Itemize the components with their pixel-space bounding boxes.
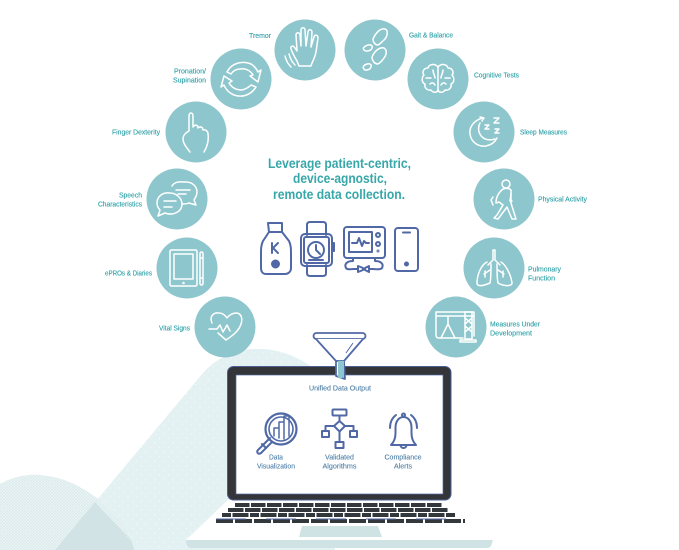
- text: data visualization: Data: [269, 454, 283, 462]
- title: Leverage patient-centric,: [268, 155, 411, 171]
- icon: compliance alerts: [390, 414, 417, 448]
- measure: cognitive tests: [408, 48, 519, 110]
- text: data visualization: [257, 454, 295, 470]
- title: remote data collection.: [273, 186, 405, 202]
- laptop trackpad: [299, 526, 382, 537]
- text: compliance alerts: Compliance: [384, 454, 422, 462]
- laptop base shadow: [186, 540, 493, 548]
- measure: vital signs: [159, 296, 256, 358]
- text: validated algorithms: Validated: [325, 454, 354, 462]
- device: smartwatch: [301, 222, 334, 276]
- measure: measures under development: Measures Under: [490, 322, 541, 328]
- icon: data visualization: [257, 414, 296, 454]
- measure: pulmonary function: [464, 238, 561, 298]
- text: compliance alerts: Alerts: [394, 464, 412, 470]
- measure: sleep measures: [454, 102, 567, 162]
- measure: vital signs: Vital Signs: [159, 326, 190, 332]
- measure: physical activity: [474, 168, 587, 230]
- background: dotted blob: [0, 475, 134, 550]
- measure: gait and balance: [344, 20, 453, 80]
- background: light diagonal band: [55, 349, 335, 550]
- measure: pulmonary function: Function: [528, 276, 555, 282]
- measure: pronation/supination: Supination: [173, 78, 206, 84]
- background: blob overlap: [55, 502, 140, 550]
- device: wearable sensor: [261, 223, 291, 274]
- measure: ePROs and diaries: [105, 238, 218, 298]
- measure: sleep measures: Sleep Measures: [520, 130, 567, 136]
- measure: tremor: [249, 20, 336, 80]
- measure: speech characteristics: [98, 168, 208, 230]
- laptop: [186, 366, 493, 548]
- measure: finger dexterity: [112, 102, 226, 162]
- measure: measures under development: Development: [490, 330, 532, 338]
- laptop screen frame: [228, 366, 451, 500]
- title: [268, 155, 411, 202]
- title: device-agnostic,: [293, 170, 387, 186]
- laptop base: [186, 498, 493, 545]
- measure: measures under development: [426, 296, 541, 358]
- device: phone: [395, 228, 418, 271]
- measure: ePROs and diaries: ePROs & Diaries: [105, 270, 152, 278]
- icon: validated algorithms: [322, 410, 357, 448]
- laptop keyboard: [216, 505, 465, 521]
- measure: speech characteristics: Speech: [119, 192, 142, 200]
- device: monitor: [344, 227, 385, 272]
- measure: pronation/supination: Pronation/: [174, 68, 206, 76]
- measure: pulmonary function: Pulmonary: [528, 266, 561, 274]
- measure: tremor: Tremor: [249, 33, 272, 40]
- funnel: [314, 333, 366, 379]
- measure: finger dexterity: Finger Dexterity: [112, 130, 160, 136]
- measure: physical activity: Physical Activity: [538, 196, 587, 204]
- text: validated algorithms: Algorithms: [322, 464, 357, 470]
- measure: pronation/supination: [173, 48, 272, 110]
- measure: speech characteristics: Characteristics: [98, 202, 142, 208]
- text: data visualization: Visualization: [257, 464, 295, 470]
- measure: gait and balance: Gait & Balance: [409, 32, 453, 40]
- label: unified data output: Unified Data Output: [309, 386, 371, 392]
- laptop screen: [236, 375, 443, 494]
- text: validated algorithms: [322, 454, 357, 470]
- measure: cognitive tests: Cognitive Tests: [474, 72, 519, 80]
- text: compliance alerts: [384, 454, 422, 470]
